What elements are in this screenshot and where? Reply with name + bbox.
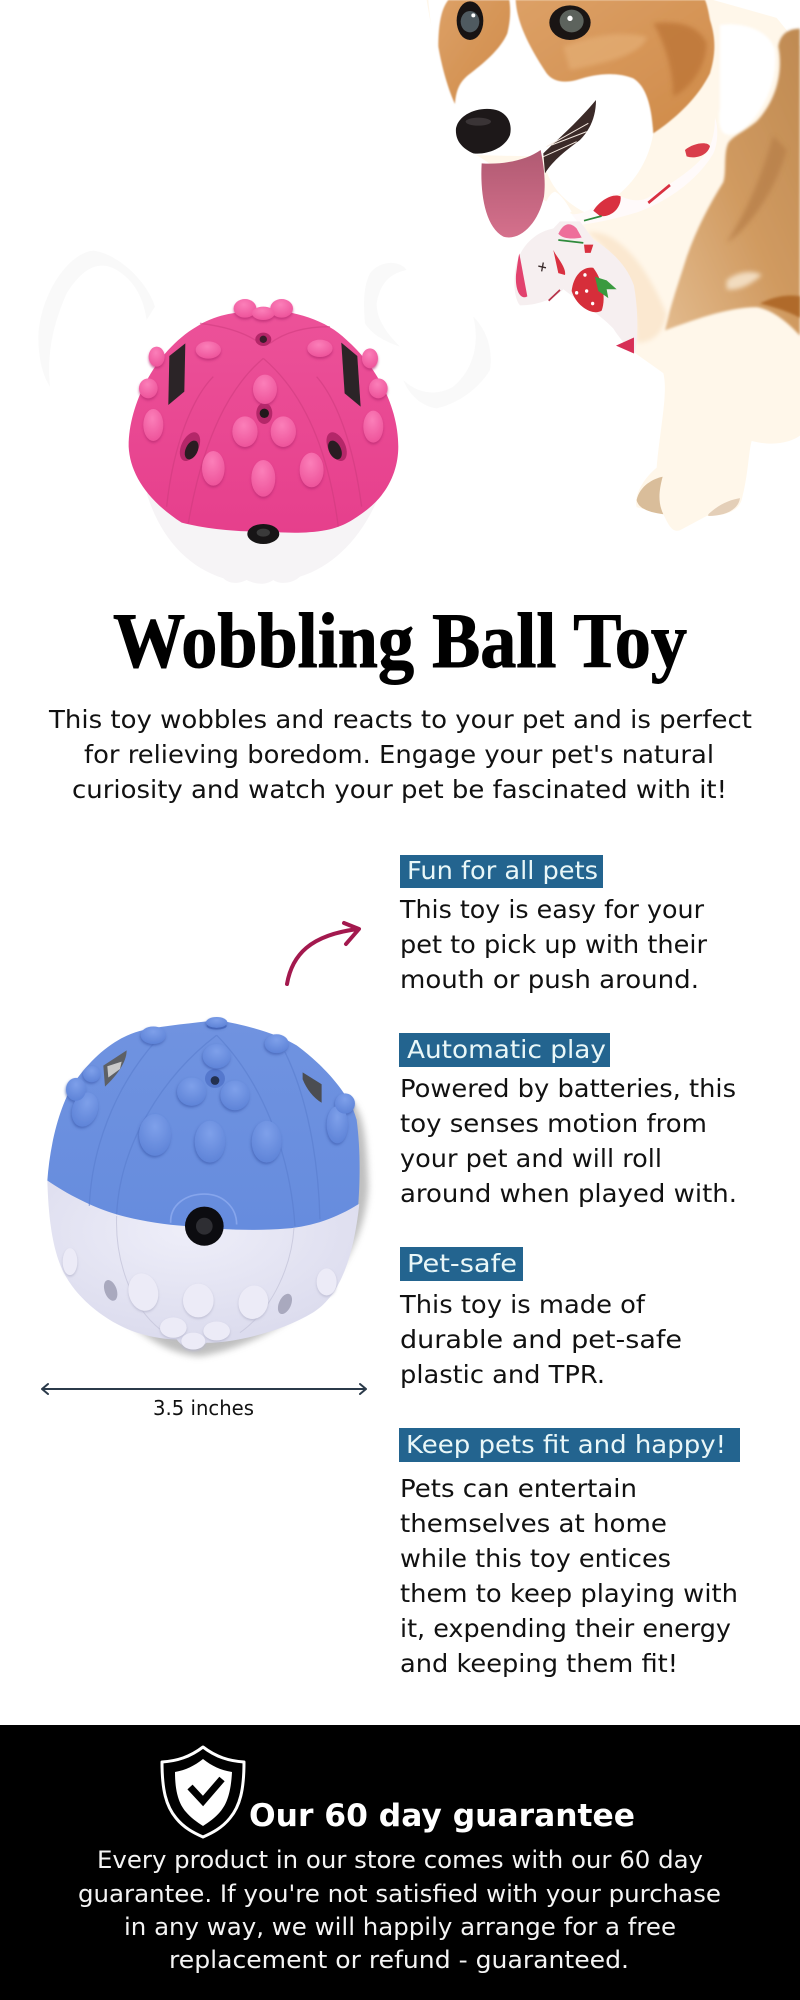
fur: darker tip	[760, 295, 800, 318]
dog body	[427, 0, 800, 531]
tag: Pet-safe	[407, 1249, 517, 1278]
lower seams	[117, 1216, 294, 1333]
body text	[399, 895, 708, 994]
fur: light chest patch	[727, 272, 762, 290]
camera windows	[168, 333, 361, 464]
body text: plastic and TPR.	[400, 1360, 605, 1389]
mouth	[543, 100, 596, 173]
bumps	[66, 1017, 355, 1163]
bandana collar	[572, 118, 717, 225]
tongue	[481, 150, 545, 237]
dog head	[428, 0, 714, 237]
body text: your pet and will roll	[400, 1144, 662, 1173]
tag: Fun for all pets	[407, 856, 598, 885]
arrow: curved pointing at features	[287, 923, 359, 984]
guarantee text: replacement or refund - guaranteed.	[169, 1946, 629, 1974]
guarantee text: in any way, we will happily arrange for a free	[124, 1913, 676, 1941]
body text	[399, 1290, 682, 1389]
body text: themselves at home	[400, 1509, 667, 1538]
photo: corgi dog with strawberry bandana	[427, 0, 800, 531]
dimension arrow	[42, 1384, 366, 1394]
fur: peach shade under bow	[587, 232, 667, 343]
lower holes	[101, 1278, 295, 1316]
guarantee text: Every product in our store comes with our 60 day	[97, 1846, 703, 1874]
fur: darker streak	[727, 136, 787, 243]
body text: pet to pick up with their	[400, 930, 708, 959]
fur: dark streak	[653, 22, 707, 97]
ball white lower half	[47, 1181, 359, 1348]
panel: guarantee footer	[0, 1725, 800, 2000]
body text: and keeping them fit!	[400, 1649, 678, 1678]
title: Wobbling Ball Toy	[113, 597, 687, 684]
body text: Powered by batteries, this	[400, 1074, 736, 1103]
body text: This toy is made of	[399, 1290, 646, 1319]
ball white lower half	[147, 493, 380, 584]
ball pink upper half	[129, 310, 398, 533]
feature: automatic play	[399, 1033, 737, 1208]
windows	[103, 1023, 322, 1103]
fur: lighter band	[563, 34, 647, 70]
body text: it, expending their energy	[400, 1614, 731, 1643]
tag: Automatic play	[407, 1035, 606, 1064]
paw toes	[637, 477, 740, 516]
shadow	[57, 1103, 368, 1356]
face outline fill	[428, 0, 653, 213]
fur: left head patch	[438, 0, 510, 104]
tag	[400, 1247, 523, 1281]
button	[185, 1207, 224, 1246]
bandana bow	[514, 221, 637, 354]
white neck patch	[719, 24, 775, 135]
guarantee text	[78, 1846, 721, 1974]
body text: toy senses motion from	[400, 1109, 707, 1138]
body text: Pets can entertain	[400, 1474, 637, 1503]
photo: blue wobbling ball	[47, 1017, 368, 1356]
body text: durable and pet-safe	[400, 1325, 682, 1354]
intro paragraph	[48, 705, 752, 804]
button ring	[171, 1194, 237, 1224]
feature: keep pets fit and happy	[399, 1428, 740, 1678]
intro paragraph: curiosity and watch your pet be fascinated with it!	[72, 775, 727, 804]
heading: Our 60 day guarantee	[249, 1798, 635, 1834]
feature: fun for all pets	[399, 855, 708, 994]
body text	[400, 1074, 737, 1208]
photo: pink wobbling ball	[129, 299, 398, 584]
body text: around when played with.	[400, 1179, 737, 1208]
intro paragraph: for relieving boredom. Engage your pet's natural	[84, 740, 714, 769]
body text: This toy is easy for your	[399, 895, 705, 924]
icon: shield with check	[162, 1747, 244, 1837]
nose	[456, 109, 511, 154]
faint ghost shapes	[38, 251, 491, 408]
body text: mouth or push around.	[400, 965, 699, 994]
body text: while this toy entices	[400, 1544, 671, 1573]
lower bumps	[63, 1248, 337, 1350]
fur: right head patch	[516, 0, 714, 133]
ball blue upper half	[47, 1020, 360, 1230]
eye right	[549, 5, 591, 40]
tag: Keep pets fit and happy!	[406, 1430, 726, 1459]
dimension label: 3.5 inches	[153, 1396, 254, 1420]
fur: body patch	[665, 29, 800, 336]
intro paragraph: This toy wobbles and reacts to your pet and is perfect	[48, 705, 752, 734]
bumps	[139, 299, 388, 497]
body text	[400, 1474, 738, 1678]
body text: them to keep playing with	[400, 1579, 738, 1608]
bandana	[514, 118, 717, 354]
ball button	[247, 524, 279, 544]
seams	[167, 323, 362, 527]
guarantee text: guarantee. If you're not satisfied with your purchase	[78, 1880, 721, 1908]
feature: pet-safe	[399, 1247, 682, 1389]
eye left	[457, 1, 483, 40]
gap by tongue	[542, 192, 572, 225]
seams	[89, 1035, 320, 1226]
dog body base	[427, 0, 800, 531]
